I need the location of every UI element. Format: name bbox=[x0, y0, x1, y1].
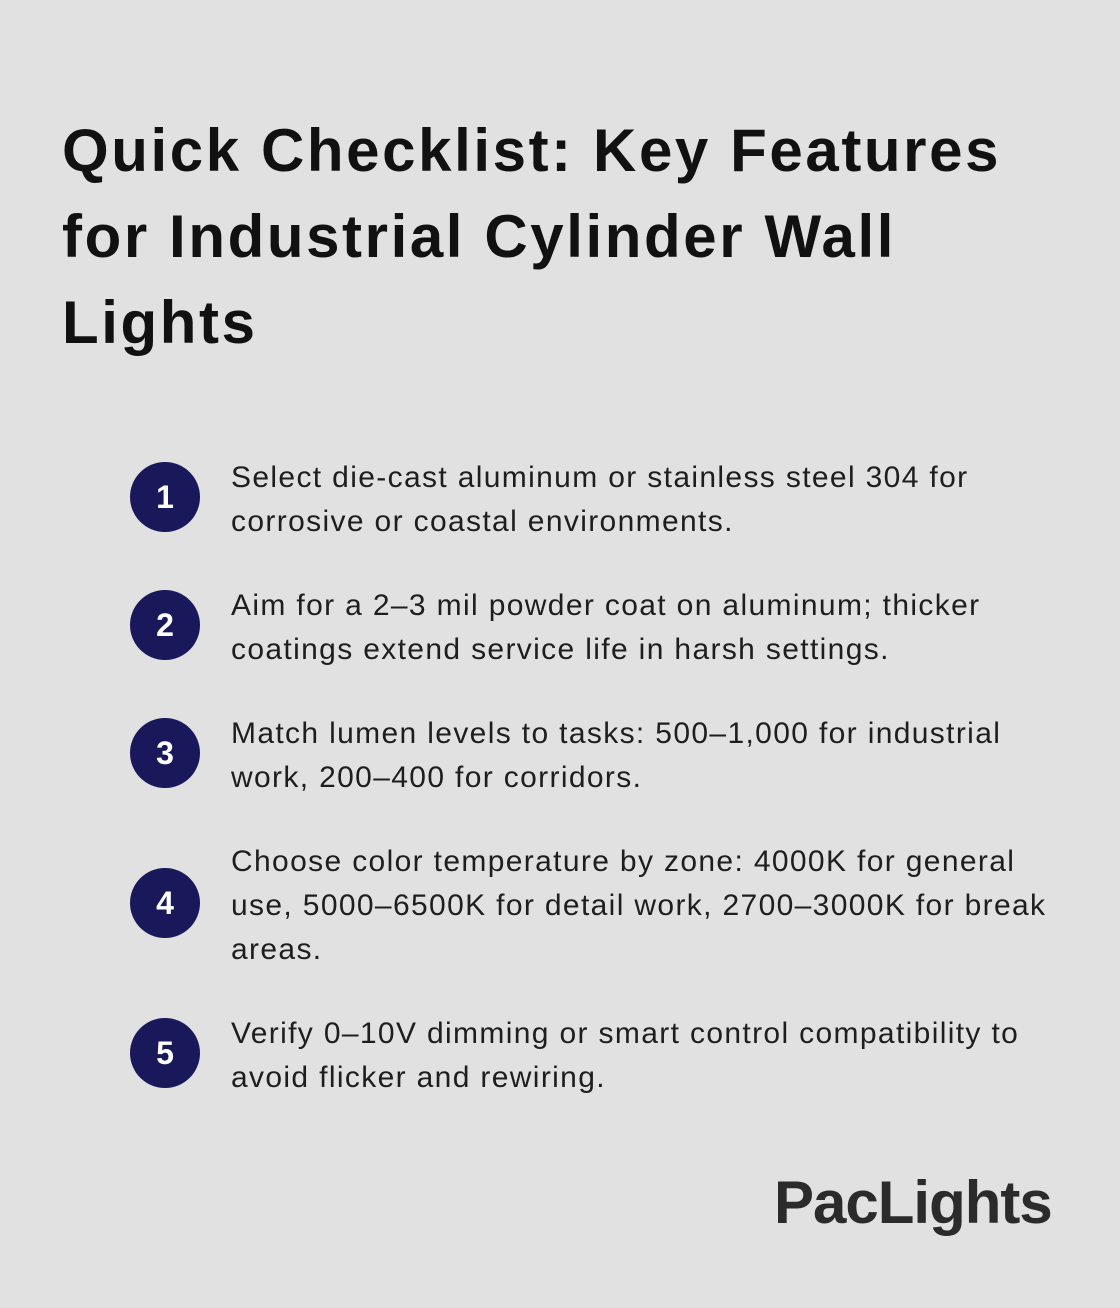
text: item 4: use, 5000–6500K for detail work, 2700–3000K for break bbox=[231, 889, 1046, 922]
logo: PacLights bbox=[774, 1169, 1052, 1236]
title bbox=[62, 117, 1001, 356]
item 1 bbox=[130, 461, 968, 538]
item 5 bbox=[130, 1017, 1019, 1094]
icon: number 5 bbox=[130, 1018, 200, 1088]
text: item 1: corrosive or coastal environments. bbox=[231, 505, 734, 538]
icon: number 3 bbox=[130, 718, 200, 788]
text: item 4: areas. bbox=[231, 933, 322, 966]
item 2 bbox=[130, 589, 980, 666]
text: item 3 bbox=[231, 717, 1001, 794]
text: item 4 bbox=[231, 845, 1046, 966]
item 3 bbox=[130, 717, 1001, 794]
icon: number 1: 1 bbox=[156, 479, 174, 515]
text: item 4: Choose color temperature by zone: 4000K for general bbox=[231, 845, 1015, 878]
title: Quick Checklist: Key Features bbox=[62, 117, 1001, 184]
text: item 1: Select die-cast aluminum or stainless steel 304 for bbox=[231, 461, 968, 494]
icon: number 1 bbox=[130, 462, 200, 532]
text: item 2: coatings extend service life in harsh settings. bbox=[231, 633, 890, 666]
icon: number 2: 2 bbox=[156, 607, 174, 643]
text: item 3: Match lumen levels to tasks: 500–1,000 for industrial bbox=[231, 717, 1001, 750]
title: Lights bbox=[62, 289, 258, 356]
text: item 5: Verify 0–10V dimming or smart control compatibility to bbox=[231, 1017, 1019, 1050]
icon: number 2 bbox=[130, 590, 200, 660]
title: for Industrial Cylinder Wall bbox=[62, 203, 896, 270]
text: item 2: Aim for a 2–3 mil powder coat on aluminum; thicker bbox=[231, 589, 980, 622]
text: item 5 bbox=[231, 1017, 1019, 1094]
icon: number 4: 4 bbox=[156, 885, 174, 921]
text: item 3: work, 200–400 for corridors. bbox=[231, 761, 642, 794]
icon: number 3: 3 bbox=[156, 735, 174, 771]
text: item 2 bbox=[231, 589, 980, 666]
icon: number 5: 5 bbox=[156, 1035, 174, 1071]
icon: number 4 bbox=[130, 868, 200, 938]
text: item 5: avoid flicker and rewiring. bbox=[231, 1061, 606, 1094]
text: item 1 bbox=[231, 461, 968, 538]
item 4 bbox=[130, 845, 1046, 966]
